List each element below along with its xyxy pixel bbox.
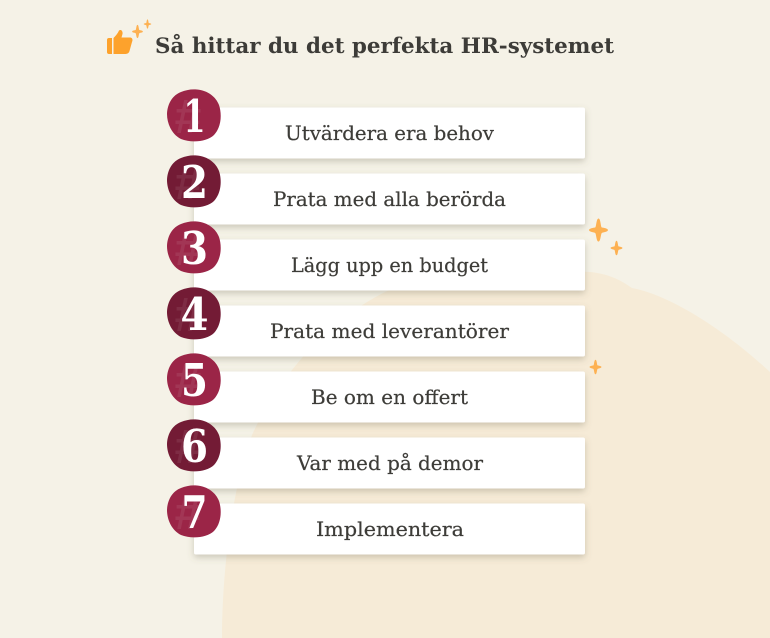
step 7 [167,485,585,554]
step 6 badge: # [175,421,201,474]
background blob [222,270,770,638]
step 6 [167,419,585,488]
step 3 badge [167,221,221,276]
step 4 badge: 4 [180,288,208,341]
step 5 [167,353,585,422]
step 5 label: Be om en offert [311,386,468,409]
step 6 badge: 6 [181,420,208,473]
step 1 card [194,108,585,158]
step 2 card [194,174,585,224]
step 3 badge: # [175,223,201,276]
step 7 card [194,504,585,554]
step 1 badge [167,89,221,144]
step 2 [167,155,585,224]
step 4 card [194,306,585,356]
step 5 badge [167,353,221,408]
step 1 [167,89,585,158]
step 5 badge: 5 [181,354,208,407]
step 6 label: Var med på demor [296,451,484,475]
step 1 label: Utvärdera era behov [285,122,494,145]
step 5 badge: # [175,355,201,408]
step 7 label: Implementera [316,518,464,541]
step 4 badge: # [175,289,201,342]
step 2 badge: 2 [181,156,208,209]
step 1 badge: # [175,91,201,144]
step 3 [167,221,585,290]
step 7 badge [167,485,221,540]
sparkle: large right [589,218,608,242]
step 1 badge: 1 [184,90,206,143]
icon: thumbs up with sparkles [107,19,151,54]
step 6 badge [167,419,221,474]
title: Så hittar du det perfekta HR-systemet [155,33,614,58]
step 2 label: Prata med alla berörda [273,188,506,211]
sparkle: lower right [590,360,601,374]
step 4 [167,287,585,356]
step 5 card [194,372,585,422]
step 7 badge: 7 [182,486,208,539]
step 2 badge [167,155,221,210]
step 6 card [194,438,585,488]
step 7 badge: # [175,487,201,540]
step 4 badge [167,287,221,342]
step 3 card [194,240,585,290]
step 3 badge: 3 [181,222,208,275]
sparkle: small right [611,241,622,255]
step 2 badge: # [175,157,201,210]
step 4 label: Prata med leverantörer [270,320,510,343]
step 3 label: Lägg upp en budget [291,254,488,277]
